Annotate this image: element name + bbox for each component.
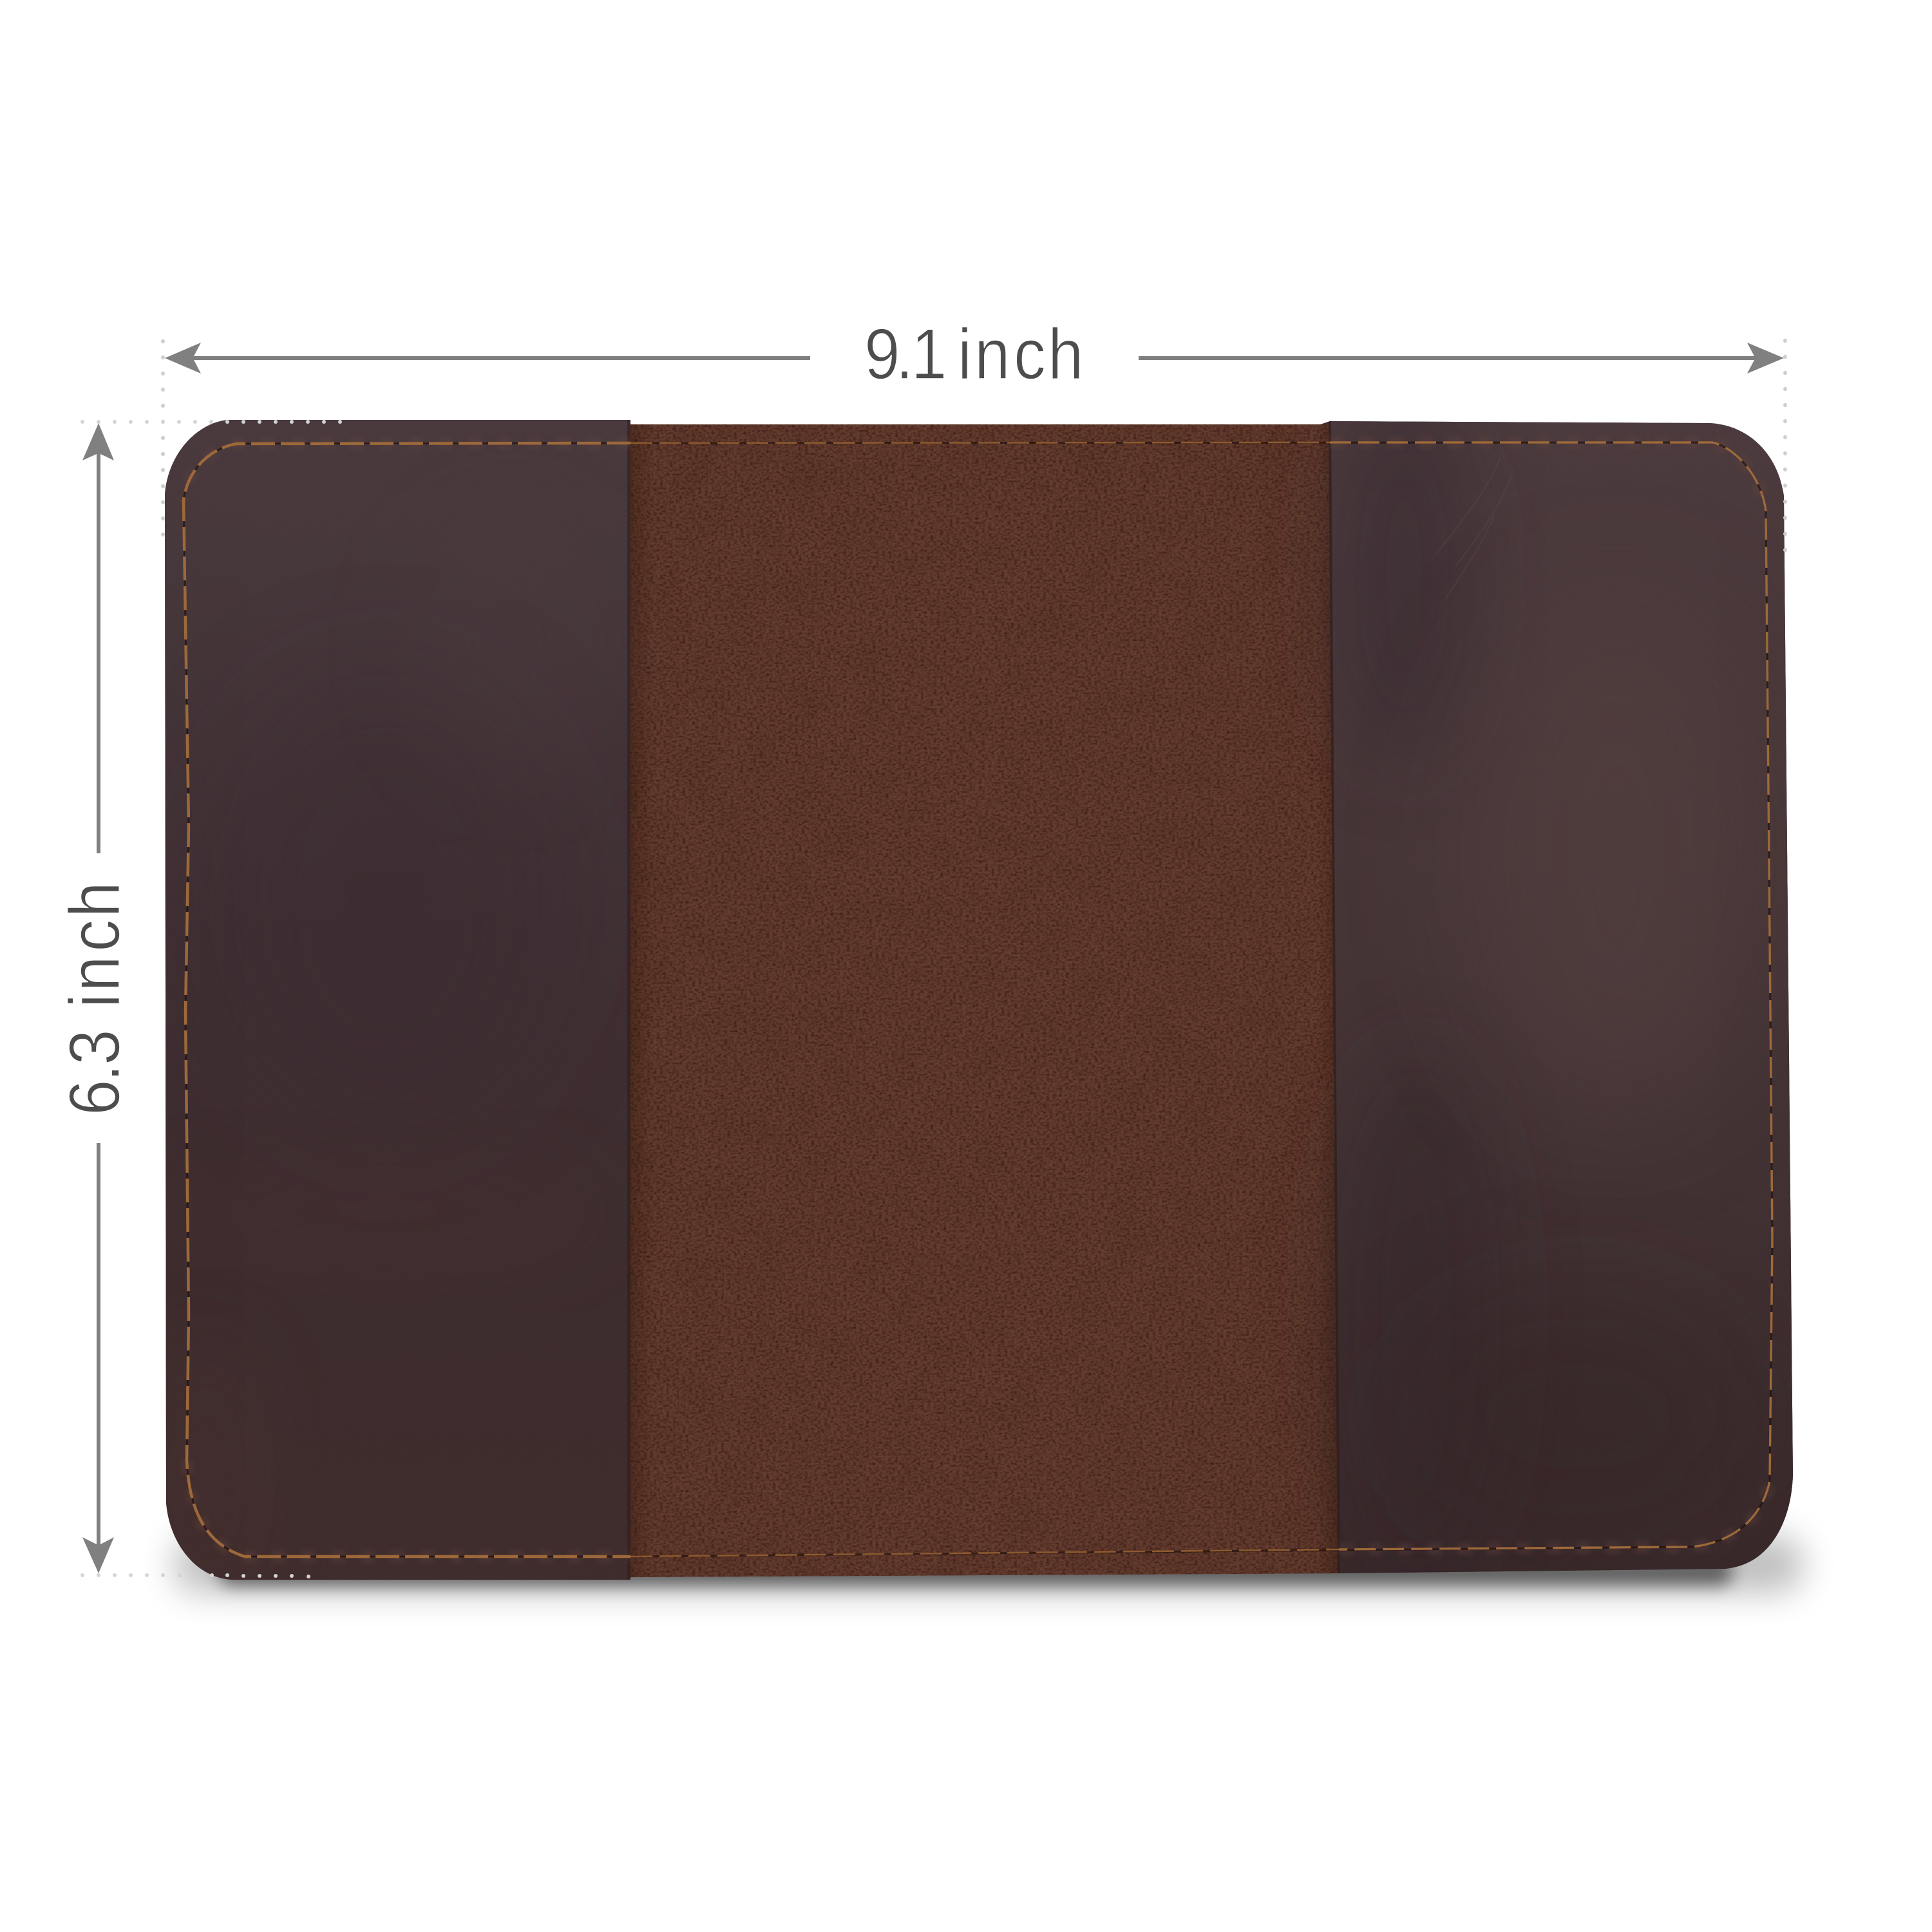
guide dots: top right vertical [1783,339,1787,552]
arrow: up [82,423,114,853]
stitching: suede thread [630,442,1339,1557]
arrow: down [82,1143,114,1573]
stitching: left flap thread [184,443,630,1557]
panel: suede interior [625,424,1346,1577]
stitching: holes [184,442,1772,1557]
arrow: right [1139,343,1784,374]
panel: right flap [1330,393,1803,1591]
height dimension: 6.3 inch [55,423,135,1573]
width dimension: 9.1 inch [165,314,1784,394]
leather cover [148,393,1803,1629]
height label: 6.3 inch [55,882,135,1115]
product dimension diagram [68,327,1817,1610]
guide dots: top horizontal [80,420,342,424]
drop shadow [174,1536,1803,1593]
stitching: right flap thread [1330,442,1772,1549]
stitch halo [184,442,1770,1557]
guide dots: bottom horizontal [80,1573,310,1578]
arrow: left [165,343,810,374]
width label: 9.1 inch [864,314,1084,394]
guide dots: top left vertical [161,339,165,536]
panel: left flap [148,412,630,1629]
spine base [155,412,1803,1591]
